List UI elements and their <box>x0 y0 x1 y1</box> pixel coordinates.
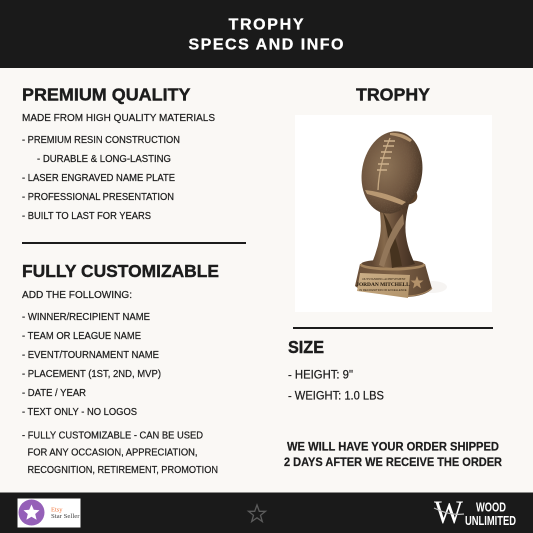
base <box>355 264 432 297</box>
list: customization options: - PLACEMENT (1ST, 2ND, MVP) <box>22 369 161 380</box>
footer band <box>0 492 533 533</box>
text: occasions <box>22 430 218 476</box>
shipping callout: WE WILL HAVE YOUR ORDER SHIPPED <box>287 442 499 454</box>
seam <box>378 138 390 190</box>
badge: etsy star seller: Etsy <box>51 506 63 514</box>
heading: premium quality: PREMIUM QUALITY <box>22 84 191 104</box>
name plate: IN RECOGNITION OF EXCELLENCE <box>359 288 407 292</box>
logo: wood unlimited: WOOD <box>476 500 506 514</box>
base star <box>410 276 424 288</box>
ball band <box>365 190 406 205</box>
list: quality features: - PROFESSIONAL PRESENTATION <box>22 192 174 203</box>
name plate: JORDAN MITCHELL <box>356 282 410 288</box>
name plate <box>356 273 410 298</box>
list: customization options <box>22 312 161 418</box>
list: quality features: - DURABLE & LONG-LASTING <box>37 154 171 165</box>
base shadow <box>417 281 447 293</box>
text: add the following: ADD THE FOLLOWING: <box>22 290 132 301</box>
text: occasions: FOR ANY OCCASION, APPRECIATION, <box>28 448 198 458</box>
name plate: OUTSTANDING ACHIEVEMENT <box>362 277 406 281</box>
list: customization options: - TEXT ONLY - NO LOGOS <box>22 407 137 418</box>
title <box>188 16 344 54</box>
trophy photo <box>295 115 492 312</box>
list: customization options: - DATE / YEAR <box>22 388 86 399</box>
list: customization options: - WINNER/RECIPIENT NAME <box>22 312 150 323</box>
laces <box>377 141 395 170</box>
text: weight: - WEIGHT: 1.0 LBS <box>288 390 384 402</box>
shipping callout <box>284 442 503 469</box>
heading: size: SIZE <box>288 337 324 357</box>
list: customization options: - EVENT/TOURNAMENT NAME <box>22 350 159 361</box>
panel: fully customizable <box>22 261 219 476</box>
badge: etsy star seller: Star Seller <box>51 514 80 520</box>
text: occasions: RECOGNITION, RETIREMENT, PROMOTION <box>28 465 218 476</box>
logo: wood unlimited <box>434 495 516 531</box>
badge: etsy star seller <box>18 498 80 528</box>
ball top band <box>390 133 412 142</box>
title: SPECS AND INFO <box>188 37 344 54</box>
ball texture <box>355 126 429 219</box>
list: quality features: - PREMIUM RESIN CONSTRUCTION <box>22 135 180 146</box>
panel: premium quality <box>22 84 215 222</box>
heading: trophy: TROPHY <box>356 84 430 104</box>
shipping callout: 2 DAYS AFTER WE RECEIVE THE ORDER <box>284 457 503 469</box>
football <box>355 126 429 219</box>
title: TROPHY <box>228 16 304 33</box>
text: materials intro: MADE FROM HIGH QUALITY MATERIALS <box>22 112 215 124</box>
panel: size <box>288 337 384 402</box>
icon: star <box>248 505 266 522</box>
list: quality features <box>22 135 180 222</box>
text: occasions: - FULLY CUSTOMIZABLE - CAN BE USED <box>22 430 203 442</box>
header band <box>0 0 533 68</box>
stem <box>371 191 417 268</box>
list: quality features: - LASER ENGRAVED NAME PLATE <box>22 173 175 184</box>
list: quality features: - BUILT TO LAST FOR YEARS <box>22 211 151 222</box>
logo: wood unlimited: W <box>434 495 464 531</box>
heading: fully customizable: FULLY CUSTOMIZABLE <box>22 261 219 281</box>
text: height: - HEIGHT: 9" <box>288 370 353 382</box>
list: customization options: - TEAM OR LEAGUE NAME <box>22 331 141 342</box>
